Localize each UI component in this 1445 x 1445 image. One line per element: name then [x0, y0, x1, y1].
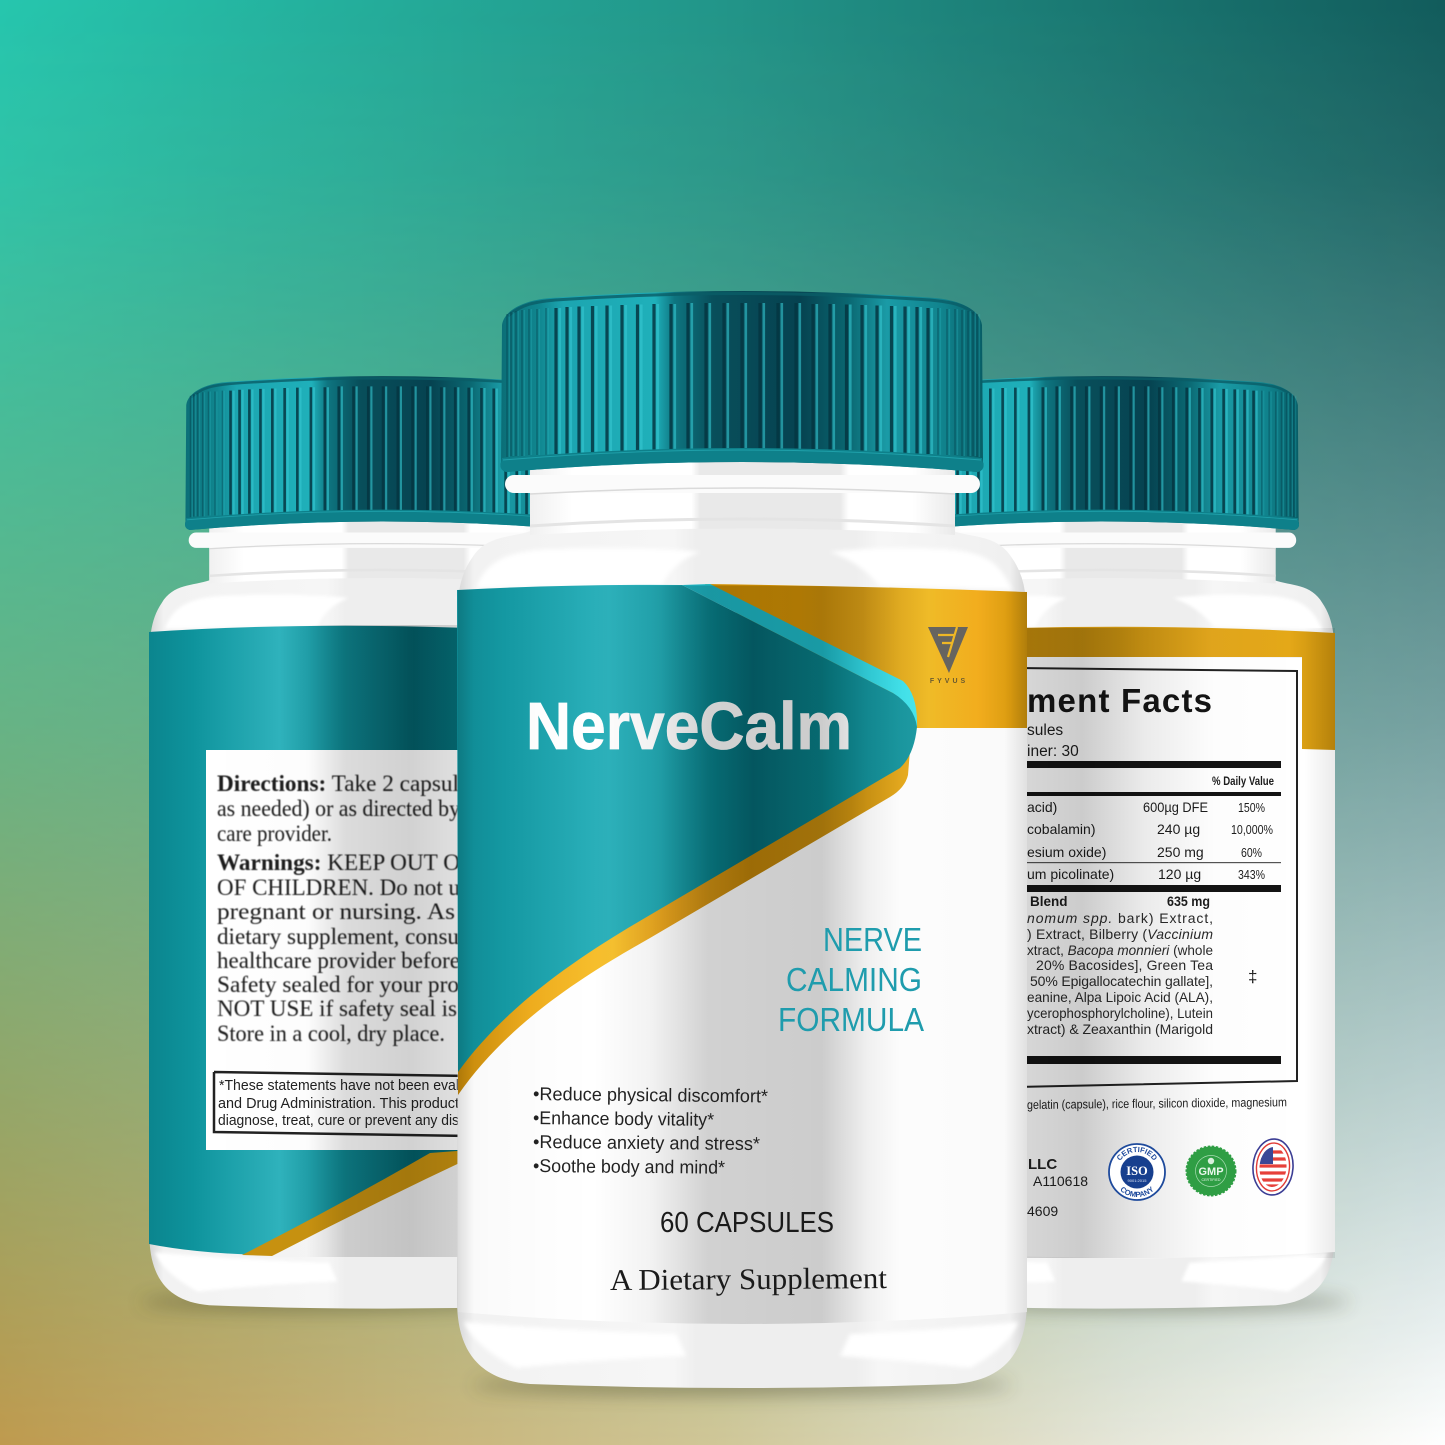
- benefit bullets: •Enhance body vitality*: [533, 1107, 714, 1130]
- directions and warnings text: dietary supplement, consu: [217, 924, 459, 949]
- directions and warnings text: Directions: Take 2 capsul: [217, 771, 459, 796]
- tagline: NERVE: [823, 921, 922, 958]
- supplement facts table: um picolinate): [1027, 866, 1114, 882]
- supplement facts table: 240 µg: [1157, 821, 1200, 837]
- right label white area: [1015, 656, 1335, 1258]
- gold swoosh: [458, 750, 910, 1095]
- supplement facts table: iner: 30: [1027, 743, 1079, 760]
- supplement facts table: Blend: [1030, 894, 1068, 909]
- center bottle: NerveCalm front: [457, 291, 1027, 1388]
- supplement facts table: ycerophosphorylcholine), Lutein: [1027, 1005, 1213, 1021]
- directions and warnings text: pregnant or nursing. As: [217, 899, 455, 924]
- directions and warnings text: care provider.: [217, 821, 332, 846]
- left label gold swoosh: [242, 1150, 470, 1256]
- left label teal panel: [149, 626, 470, 1255]
- directions and warnings text: as needed) or as directed by: [217, 796, 460, 821]
- other ingredients line: gelatin (capsule), rice flour, silicon dioxide, magnesium: [1027, 1095, 1287, 1112]
- icon: GMP badge: GMP: [1198, 1166, 1224, 1178]
- supplement facts table: esium oxide): [1027, 844, 1106, 860]
- brand name: NerveCalm: [526, 689, 852, 764]
- directions and warnings text: NOT USE if safety seal is: [217, 996, 457, 1021]
- supplement facts table: 20% Bacosides], Green Tea: [1036, 957, 1213, 973]
- supplement facts table: cobalamin): [1027, 821, 1095, 837]
- benefit bullets: •Soothe body and mind*: [533, 1155, 725, 1178]
- manufacturer text: [1027, 1156, 1088, 1219]
- left bottle: directions label: [149, 376, 617, 1309]
- supplement facts table: 150%: [1238, 801, 1265, 815]
- supplement facts table: nomum spp. bark) Extract,: [1027, 910, 1213, 926]
- benefit bullets: •Reduce physical discomfort*: [533, 1083, 768, 1106]
- icon: ISO badge: [1108, 1143, 1166, 1201]
- manufacturer text: 4609: [1027, 1203, 1058, 1219]
- supplement facts table: 600µg DFE: [1143, 799, 1208, 815]
- supplement facts table: acid): [1027, 799, 1057, 815]
- supplement facts table: 10,000%: [1231, 823, 1273, 837]
- supplement facts table: 343%: [1238, 868, 1265, 882]
- FDA disclaimer box: *These statements have not been eval: [219, 1078, 459, 1094]
- supplement facts table: ) Extract, Bilberry (Vaccinium: [1027, 926, 1213, 942]
- supplement facts table: sules: [1027, 722, 1063, 739]
- supplement facts table: 635 mg: [1167, 894, 1210, 909]
- benefit bullets: [533, 1083, 768, 1178]
- manufacturer text: LLC: [1028, 1156, 1057, 1173]
- directions and warnings text: Safety sealed for your pro: [217, 972, 459, 997]
- cyan stripe: [682, 584, 917, 727]
- facts heading: ment Facts: [1027, 682, 1212, 719]
- directions and warnings text: Store in a cool, dry place.: [217, 1021, 445, 1046]
- FDA disclaimer box: and Drug Administration. This product: [218, 1096, 459, 1112]
- FDA disclaimer box: [214, 1072, 470, 1136]
- tagline: [778, 921, 924, 1038]
- manufacturer text: A110618: [1033, 1173, 1088, 1189]
- tagline: CALMING: [786, 961, 922, 998]
- capsule count: 60 CAPSULES: [660, 1207, 834, 1239]
- center label gold corner: [705, 584, 1027, 728]
- directions and warnings text: OF CHILDREN. Do not u: [217, 875, 460, 900]
- icon: ISO badge: CERTIFIED: [1117, 1146, 1157, 1160]
- supplement facts table: eanine, Alpa Lipoic Acid (ALA),: [1027, 989, 1213, 1005]
- left label white panel: [206, 750, 471, 1150]
- icon: US flag badge: [1251, 1138, 1295, 1196]
- right label gold band: [1015, 627, 1335, 750]
- teal panel: [457, 585, 917, 1072]
- supplement facts table: xtract, Bacopa monnieri (whole: [1027, 942, 1213, 958]
- icon: GMP badge: [1186, 1146, 1236, 1196]
- icon: ISO badge: 9001:2015: [1128, 1178, 1147, 1183]
- dietary supplement line: A Dietary Supplement: [610, 1262, 888, 1297]
- supplement facts table: ‡: [1248, 967, 1257, 986]
- label shading: [458, 585, 1027, 1324]
- FDA disclaimer box: diagnose, treat, cure or prevent any dis: [218, 1113, 459, 1129]
- supplement facts table: 250 mg: [1157, 844, 1204, 860]
- supplement facts table: xtract) & Zeaxanthin (Marigold: [1027, 1021, 1213, 1037]
- benefit bullets: •Reduce anxiety and stress*: [533, 1131, 760, 1154]
- icon: ISO badge: ISO: [1126, 1164, 1148, 1178]
- directions and warnings text: [217, 771, 460, 1046]
- supplement facts table: % Daily Value: [1212, 776, 1274, 788]
- supplement facts table: 120 µg: [1158, 866, 1201, 882]
- icon: ISO badge: COMPANY: [1120, 1186, 1153, 1197]
- logo: FYVUS: [930, 678, 968, 685]
- tagline: FORMULA: [778, 1001, 924, 1038]
- directions and warnings text: healthcare provider before: [217, 948, 460, 973]
- supplement facts table: 60%: [1241, 846, 1262, 860]
- directions and warnings text: Warnings: KEEP OUT O: [217, 850, 460, 875]
- icon: GMP badge: CERTIFIED: [1202, 1178, 1221, 1182]
- supplement facts table: [1015, 668, 1297, 1087]
- logo: [928, 627, 968, 685]
- floor shadows: [140, 1293, 1350, 1395]
- center bottle body and cap: [457, 291, 1027, 1388]
- supplement facts table: 50% Epigallocatechin gallate],: [1030, 973, 1213, 989]
- center label white base: [458, 585, 1027, 1324]
- right bottle: supplement facts label: [955, 376, 1335, 1309]
